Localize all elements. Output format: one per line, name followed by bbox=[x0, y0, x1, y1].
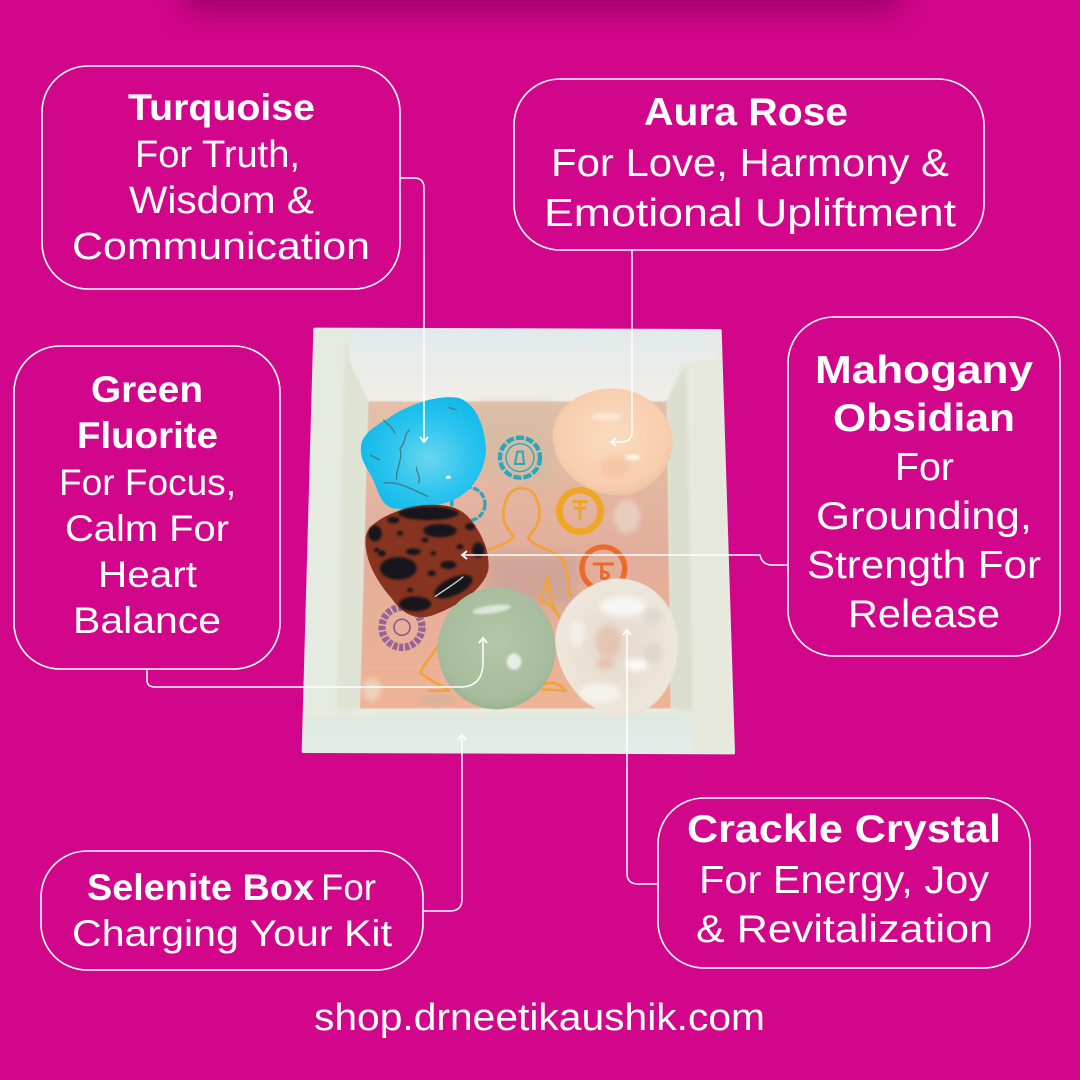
blue chakra partial bbox=[452, 487, 485, 521]
orange chakra bbox=[582, 547, 625, 590]
arrow: green fluorite bbox=[147, 638, 487, 687]
heading: mahogany obsidian: Mahogany bbox=[815, 349, 1033, 392]
selenite box bbox=[303, 328, 733, 753]
text: turquoise benefits bbox=[72, 134, 370, 268]
text: selenite box bbox=[72, 867, 393, 954]
panel: turquoise bbox=[42, 66, 400, 289]
heading: green fluorite: Green bbox=[91, 369, 203, 410]
arrow: crackle crystal bbox=[623, 630, 658, 884]
text: selenite box: For bbox=[321, 867, 376, 908]
heading: mahogany obsidian: Obsidian bbox=[833, 397, 1015, 440]
footer url: shop.drneetikaushik.com bbox=[314, 997, 765, 1039]
stone: turquoise bbox=[361, 397, 486, 509]
text: aura rose benefits bbox=[544, 142, 956, 235]
text: green fluorite benefits: Heart bbox=[98, 554, 198, 595]
arrow: selenite box bbox=[423, 735, 466, 911]
text: green fluorite benefits: Calm For bbox=[65, 508, 229, 549]
top shadow bbox=[185, 0, 900, 12]
text: turquoise benefits: For Truth, bbox=[135, 134, 300, 176]
yellow chakra bbox=[559, 490, 601, 532]
panel: aura rose bbox=[514, 79, 984, 250]
chakra symbols and figure bbox=[382, 438, 625, 691]
text: mahogany obsidian benefits: Grounding, bbox=[816, 495, 1032, 538]
photo: selenite box with crystals bbox=[303, 328, 733, 753]
stone: crackle crystal bbox=[555, 578, 678, 716]
heading: aura rose: Aura Rose bbox=[644, 91, 848, 134]
panel: crackle crystal bbox=[658, 798, 1030, 968]
heading: mahogany obsidian bbox=[815, 349, 1033, 440]
stone: aura rose bbox=[553, 388, 673, 495]
purple chakra bbox=[382, 607, 422, 647]
arrow: mahogany obsidian bbox=[462, 551, 788, 565]
text: green fluorite benefits bbox=[59, 462, 236, 641]
text: aura rose benefits: Emotional Upliftment bbox=[544, 192, 956, 235]
text: crackle crystal benefits: For Energy, Joy bbox=[699, 859, 990, 902]
text: selenite box: Charging Your Kit bbox=[72, 913, 393, 954]
text: mahogany obsidian benefits bbox=[807, 446, 1041, 636]
stone: green fluorite bbox=[438, 587, 556, 709]
heading: crackle crystal: Crackle Crystal bbox=[687, 808, 1001, 851]
arrow: turquoise bbox=[400, 178, 428, 442]
heading: green fluorite: Fluorite bbox=[77, 415, 218, 456]
text: mahogany obsidian benefits: Strength For bbox=[807, 544, 1041, 587]
text: selenite box: Selenite Box bbox=[87, 867, 314, 908]
text: aura rose benefits: For Love, Harmony & bbox=[551, 142, 949, 185]
text: crackle crystal benefits: & Revitalization bbox=[696, 908, 993, 951]
text: mahogany obsidian benefits: For bbox=[895, 446, 954, 489]
arrow: aura rose bbox=[611, 250, 632, 446]
heading: green fluorite bbox=[77, 369, 218, 456]
text: green fluorite benefits: For Focus, bbox=[59, 462, 236, 503]
text: turquoise benefits: Wisdom & bbox=[129, 180, 314, 222]
panel: mahogany obsidian bbox=[788, 317, 1060, 656]
panel: green fluorite bbox=[14, 346, 280, 669]
text: mahogany obsidian benefits: Release bbox=[848, 593, 1000, 636]
stone: mahogany obsidian bbox=[365, 505, 489, 617]
blue chakra bbox=[500, 438, 540, 478]
heading: turquoise: Turquoise bbox=[128, 87, 315, 128]
figure outline bbox=[421, 488, 570, 691]
text: green fluorite benefits: Balance bbox=[73, 600, 221, 641]
panel: selenite box bbox=[41, 851, 423, 970]
text: turquoise benefits: Communication bbox=[72, 226, 370, 268]
text: crackle crystal benefits bbox=[696, 859, 993, 951]
